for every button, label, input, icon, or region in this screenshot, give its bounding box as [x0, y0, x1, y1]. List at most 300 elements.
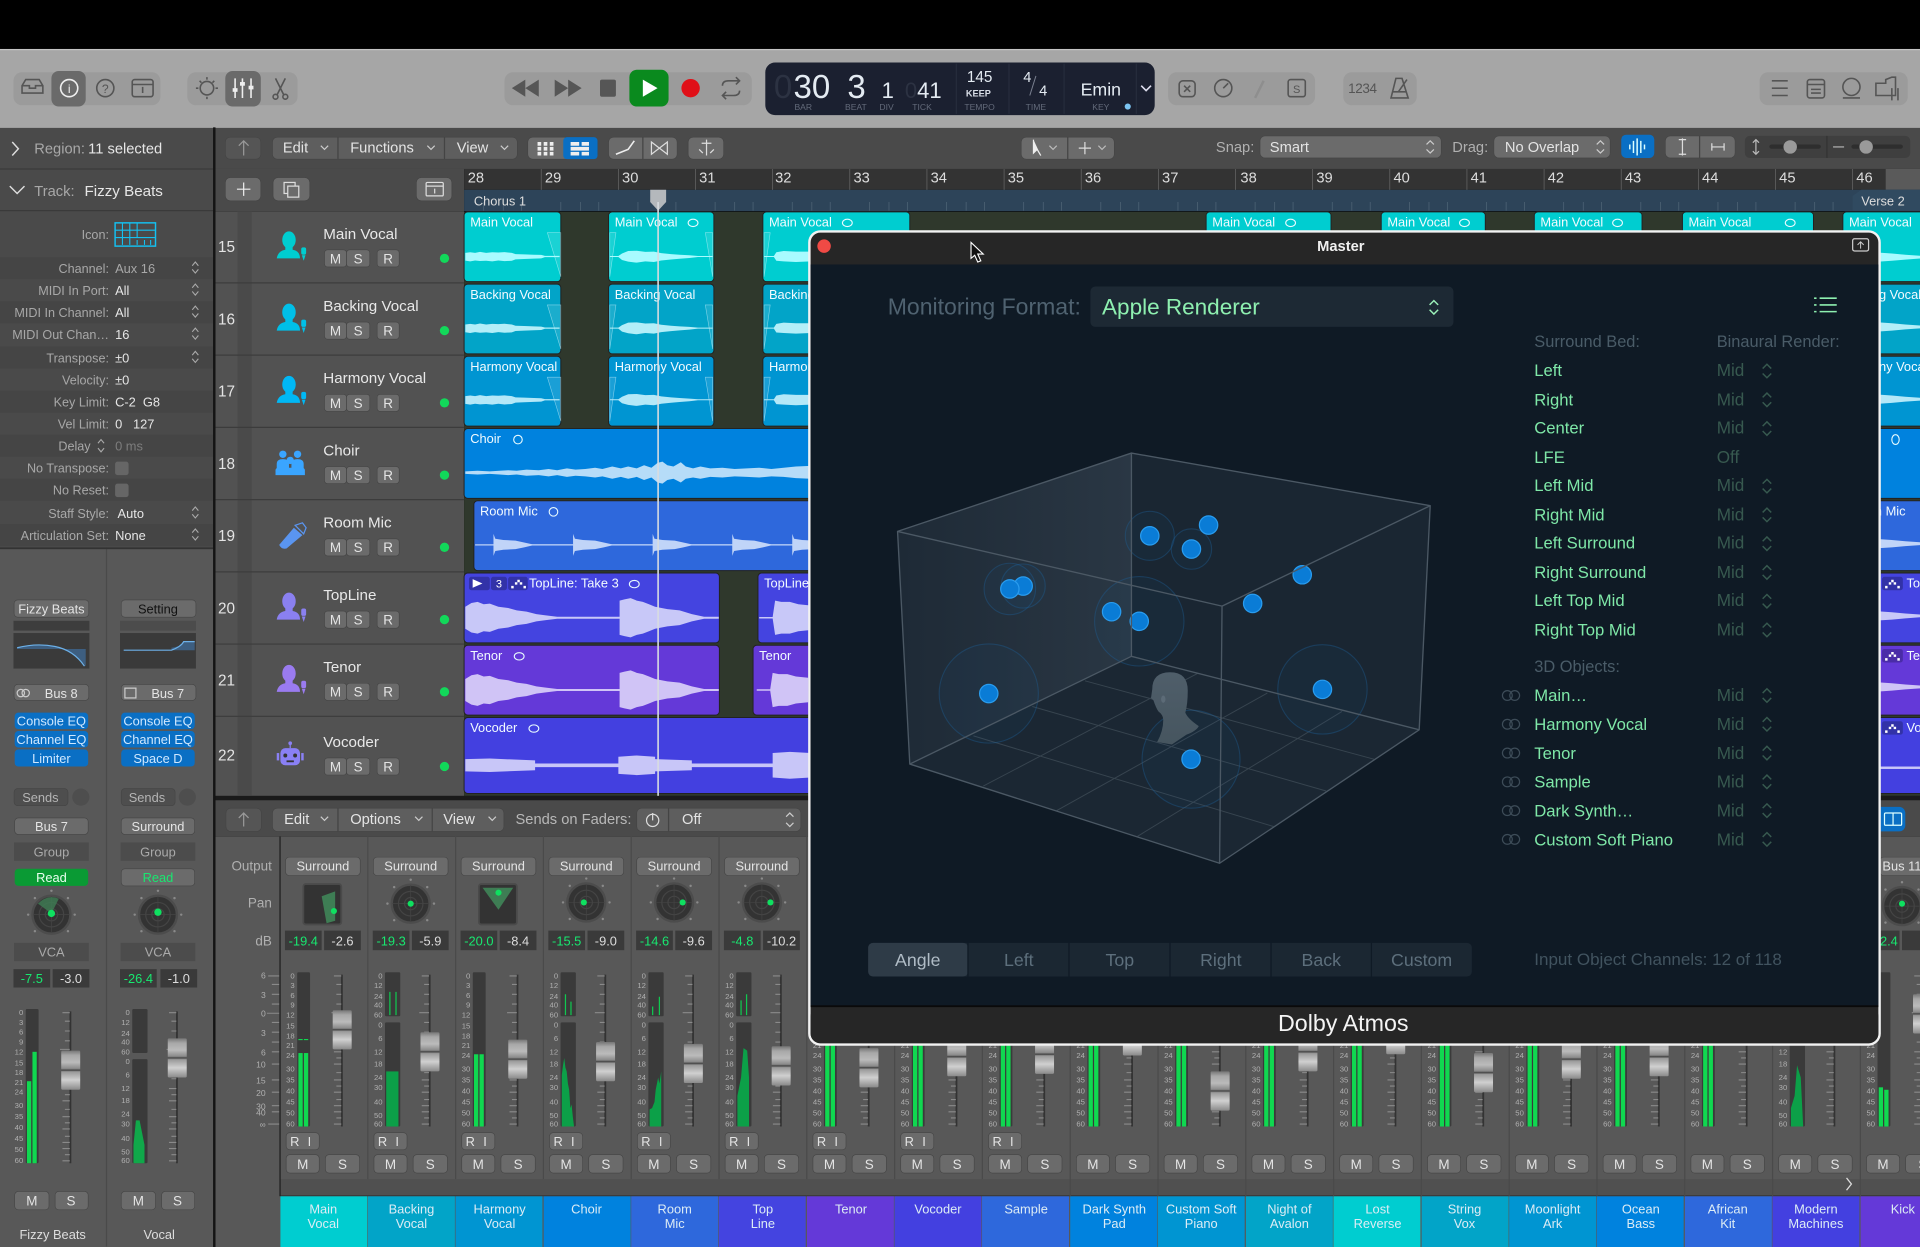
3D room visualisation: [898, 453, 1430, 863]
mixer channel names: Top: [752, 1201, 773, 1216]
LCD display: 4: [1039, 84, 1047, 100]
channel strip: Vocal: Sends: [129, 790, 165, 805]
track 17: Harmony Vocal: 17: [218, 384, 235, 401]
mixer channel names: Vocal: [484, 1216, 515, 1231]
playhead: [650, 190, 666, 796]
take folder controls: 3: [496, 579, 502, 591]
surround bed list: Right: [1534, 390, 1574, 409]
room wireframe: [898, 453, 1430, 863]
strip: Dark Synth Pad: [1076, 955, 1150, 1173]
surround bed list: Mid: [1717, 360, 1744, 380]
track headers: [216, 212, 464, 796]
strip: Harmony Vocal: -8.4: [507, 933, 529, 948]
strip: African Kit: [1691, 955, 1764, 1173]
meter and fader: [15, 1008, 80, 1165]
strip: Top Line: -10.2: [767, 933, 796, 948]
3D objects list: 3D Objects:: [1534, 658, 1620, 676]
timeline ruler: 28: [468, 170, 484, 186]
LCD display: TICK: [912, 102, 932, 112]
region labels: Tenor: [759, 648, 792, 663]
footer: Dolby Atmos: Dolby Atmos: [1278, 1010, 1409, 1036]
mixer channel names: Pad: [1103, 1216, 1126, 1231]
LCD display: 0: [905, 78, 917, 103]
track inspector parameters: No Reset:: [53, 484, 109, 498]
mixer toolbar: Off: [682, 812, 702, 828]
view angle tabs: Right: [1200, 950, 1242, 970]
strip: Custom Soft Piano: [1164, 955, 1238, 1173]
track 21: Tenor: [218, 659, 449, 700]
timeline ruler: 33: [853, 170, 870, 186]
take folder controls: [469, 577, 1903, 735]
master fader scale: 0: [261, 1008, 266, 1018]
master fader scale: 3: [261, 990, 266, 1000]
arrange toolbar: [216, 128, 1920, 169]
top black bar: [0, 0, 1920, 49]
channel strip: Vocal: Setting: [138, 601, 178, 616]
track inspector parameters: C-2 G8: [115, 395, 160, 410]
toolbar group: lists, notes, loops, media: [1760, 72, 1908, 105]
strip: Room Mic: -14.6: [640, 933, 669, 948]
track 16: Backing Vocal: 16: [218, 311, 235, 328]
footer: Dolby Atmos: [811, 1005, 1878, 1043]
mixer channel names: Tenor: [835, 1201, 868, 1216]
track inspector parameters: Channel:: [58, 262, 109, 276]
timeline ruler: 42: [1548, 170, 1564, 186]
track inspector parameters: 0 ms: [115, 439, 143, 454]
LCD display: 30: [793, 69, 830, 106]
surround bed list: Mid: [1717, 504, 1744, 524]
menu: edit, functions, view: Edit: [283, 140, 308, 156]
track inspector parameters: ±0: [115, 372, 129, 387]
track inspector parameters: Transpose:: [46, 351, 109, 365]
strip: Backing Vocal: Surround: [384, 859, 437, 874]
channel strip: Fizzy Beats: Read: [36, 870, 67, 885]
channel strip: Vocal: Read: [143, 870, 173, 885]
strip: Harmony Vocal: [461, 857, 536, 1173]
track inspector parameters: Delay: [58, 440, 91, 454]
channel strip: Fizzy Beats: -3.0: [60, 971, 82, 986]
surround bed list: Mid: [1717, 619, 1744, 639]
mixer channel names: [280, 1196, 1920, 1247]
master fader scale: 20: [256, 1088, 266, 1098]
track 18: Choir: Choir: [323, 443, 360, 460]
strip: Main Vocal: Surround: [296, 859, 349, 874]
channel strip: Fizzy Beats: Limiter: [32, 751, 71, 766]
toolbar group: brightness, mixer, scissors: [187, 71, 298, 107]
mixer channel names: Machines: [1788, 1216, 1843, 1231]
snap and drag settings: Drag:: [1452, 140, 1488, 156]
strip: Ocean Bass: [1603, 955, 1677, 1173]
region labels: Backing Vocal: [769, 287, 850, 302]
track inspector parameters: All: [115, 283, 129, 298]
timeline ruler: 34: [931, 170, 947, 186]
mixer channel names: Kit: [1720, 1216, 1736, 1231]
region labels: Main Vocal: [1849, 215, 1912, 230]
view angle tabs: Back: [1301, 950, 1341, 970]
mixer channel names: Vocoder: [914, 1201, 962, 1216]
strip: Modern Machines: [1779, 971, 1852, 1173]
surround bed list: Mid: [1717, 590, 1744, 610]
channel strip: Fizzy Beats: Bus 7: [35, 819, 68, 834]
menu: edit, functions, view: View: [457, 140, 489, 156]
track 15: Main Vocal: 15: [218, 239, 235, 256]
strip: Backing Vocal: -5.9: [419, 933, 441, 948]
channel strip: Fizzy Beats: Channel EQ: [16, 732, 86, 747]
mixer channel names: Custom Soft: [1166, 1201, 1237, 1216]
surround bed list: Right Mid: [1534, 505, 1605, 524]
surround bed list: Mid: [1717, 562, 1744, 582]
surround bed list: Left: [1534, 361, 1562, 380]
surround bed list: Right Top Mid: [1534, 620, 1636, 639]
region labels: Main Vocal: [470, 215, 533, 230]
region labels: Tenor: [470, 648, 503, 663]
timeline ruler: 29: [545, 170, 561, 186]
track inspector parameters: [0, 223, 213, 546]
toolbar group: library, info, help, download: [13, 71, 160, 107]
track inspector parameters: Key Limit:: [54, 396, 109, 410]
toolbar group: library, info, help, download: ?: [102, 82, 109, 96]
track inspector parameters: Auto: [118, 506, 144, 521]
floor grid: [973, 673, 1374, 836]
track inspector parameters: 16: [115, 327, 129, 342]
channel strip: Vocal: Space D: [133, 751, 183, 766]
panel divider: [213, 127, 216, 1247]
channel strip: Vocal: Console EQ: [123, 713, 193, 728]
channel strip: Fizzy Beats: -7.5: [21, 971, 43, 986]
3D objects list: [1502, 658, 1771, 849]
track inspector parameters: Aux 16: [115, 261, 155, 276]
marker track: Chorus 1, Verse 2: Chorus 1: [474, 194, 526, 209]
arrange regions: [464, 212, 1920, 796]
inspector header: Fizzy Beats: [84, 183, 163, 200]
3D objects list: Sample: [1534, 772, 1591, 791]
channel strip: Vocal: Surround: [132, 819, 184, 834]
region labels: Harmony Vocal: [470, 359, 557, 374]
channel strip: Vocal: -1.0: [168, 971, 190, 986]
timeline ruler: 43: [1625, 170, 1641, 186]
window title bar: [817, 239, 1869, 255]
strip: Top Line: [724, 857, 800, 1173]
3D objects list: Mid: [1717, 714, 1744, 734]
channel strip: Vocal: Channel EQ: [123, 732, 193, 747]
surround bed list: Surround Bed:: [1534, 333, 1640, 351]
inspector header: Region:: [34, 142, 85, 158]
strip: Choir: -9.0: [595, 933, 617, 948]
master fader scale: 40: [256, 1107, 266, 1117]
region labels: Main Vocal: [1689, 215, 1751, 230]
strip: Top Line: Surround: [735, 859, 788, 874]
track 18: Choir: [218, 443, 449, 484]
mixer channel names: Moonlight: [1525, 1201, 1581, 1216]
mixer toolbar: View: [443, 812, 475, 828]
monitoring format selector: [888, 287, 1453, 327]
mixer channel names: Kick: [1891, 1201, 1916, 1216]
track inspector parameters: No Transpose:: [27, 462, 109, 476]
surround bed list: Mid: [1717, 475, 1744, 495]
strip: Room Mic: Surround: [648, 859, 701, 874]
strip: Main Vocal: -2.6: [331, 933, 354, 948]
view mode buttons: [528, 137, 598, 159]
3D objects list: Mid: [1717, 771, 1744, 791]
pan knob: [27, 890, 76, 934]
strip: Kick / Bus 11: [1866, 857, 1920, 1173]
3D objects list: Main…: [1534, 686, 1587, 705]
mixer channel names: Harmony: [474, 1201, 526, 1216]
surround bed list: Mid: [1717, 417, 1744, 437]
LCD display: 1: [882, 78, 894, 103]
timeline ruler: 45: [1779, 170, 1796, 186]
strip: Harmony Vocal: -20.0: [464, 933, 494, 948]
master fader scale: 3: [261, 1028, 266, 1038]
3D objects list: Tenor: [1534, 744, 1576, 763]
region labels: [470, 215, 1920, 735]
mixer channel names: Lost: [1365, 1201, 1390, 1216]
track inspector parameters: Articulation Set:: [21, 529, 109, 543]
channel strip: Vocal: M: [133, 1193, 144, 1208]
track 17: Harmony Vocal: [218, 370, 449, 411]
surround bed list: Right Surround: [1534, 563, 1646, 582]
pan knob: [133, 890, 182, 934]
3D objects list: Mid: [1717, 743, 1744, 763]
track 17: Harmony Vocal: Harmony Vocal: [323, 370, 426, 387]
LCD display: 0: [774, 69, 792, 106]
channel strip: Fizzy Beats: Group: [34, 845, 69, 860]
mixer channel names: Vocal: [396, 1216, 427, 1231]
mixer channel names: Sample: [1004, 1201, 1048, 1216]
loop icons: [514, 219, 1899, 732]
mouse cursor: [971, 242, 983, 262]
track inspector parameters: None: [115, 528, 146, 543]
track inspector parameters: 0 127: [115, 417, 154, 432]
mixer channel names: Main: [309, 1201, 337, 1216]
inspector header: [0, 128, 214, 797]
main toolbar: [0, 49, 1920, 128]
channel strip: Vocal: Group: [140, 845, 176, 860]
track 15: Main Vocal: Main Vocal: [323, 226, 397, 243]
region labels: Main Vocal: [615, 215, 678, 230]
channel strip: Fizzy Beats: Fizzy Beats: [18, 601, 85, 616]
region labels: Choir: [470, 431, 502, 446]
strip: Lost Reverse: [1340, 955, 1413, 1173]
strip: Moonlight Ark: [1515, 955, 1589, 1173]
mixer channel names: Choir: [571, 1201, 603, 1216]
object channel count: Input Object Channels: 12 of 118: [1534, 950, 1782, 969]
mixer channel names: Ark: [1543, 1216, 1563, 1231]
channel strip: Fizzy Beats: Sends: [22, 790, 59, 805]
scroll chevron: [1847, 1178, 1851, 1190]
track inspector parameters: MIDI In Channel:: [14, 306, 109, 320]
region labels: Main Vocal: [769, 215, 832, 230]
view angle tabs: Custom: [1391, 950, 1452, 970]
sound object halos: [939, 511, 1367, 808]
strip: Main Vocal: [285, 857, 361, 1173]
channel strip: Vocal: -26.4: [124, 971, 153, 986]
monitoring format selector: Apple Renderer: [1102, 295, 1260, 320]
track inspector parameters: Staff Style:: [48, 507, 109, 521]
split view button: [1873, 807, 1905, 831]
track 20: TopLine: TopLine: [323, 587, 376, 604]
region labels: Main Vocal: [1540, 215, 1603, 230]
strip: String Vox: [1428, 955, 1501, 1173]
master fader scale: 6: [261, 1047, 266, 1057]
surround bed list: Left Mid: [1534, 476, 1593, 495]
strip: Top Line: -4.8: [731, 933, 753, 948]
region labels: Room Mic: [1848, 504, 1906, 519]
strip: Kick / Bus 11: 2.4: [1880, 933, 1898, 948]
track 15: Main Vocal: [218, 226, 449, 267]
LCD display: KEEP: [966, 89, 991, 99]
3D objects list: Dark Synth…: [1534, 802, 1633, 821]
timeline ruler: 38: [1240, 170, 1257, 186]
mixer channel names: Modern: [1794, 1201, 1838, 1216]
strip: Main Vocal: -19.4: [289, 933, 318, 948]
mixer channel names: African: [1708, 1201, 1748, 1216]
master fader scale: 15: [256, 1076, 266, 1086]
mixer channel names: Mic: [665, 1216, 685, 1231]
track 16: Backing Vocal: Backing Vocal: [323, 298, 419, 315]
inspector header: Track:: [34, 184, 75, 200]
region labels: Harmony Vocal: [769, 359, 856, 374]
region labels: Main Vocal: [1212, 215, 1275, 230]
surround bed list: LFE: [1534, 448, 1565, 467]
track 21: Tenor: Tenor: [323, 659, 361, 676]
track 22: Vocoder: Vocoder: [323, 734, 379, 751]
automation buttons: [609, 137, 724, 159]
region labels: Harmony Vocal: [615, 359, 702, 374]
region labels: Backing Vocal: [615, 287, 695, 302]
master fader scale: 10: [256, 1060, 266, 1070]
timeline ruler: 30: [622, 170, 638, 186]
region labels: Backing Vocal: [470, 287, 551, 302]
icon: drum machine: [115, 223, 156, 246]
strip: Vocoder: [901, 955, 974, 1173]
menu: edit, functions, view: [272, 137, 517, 159]
strip: Choir: Surround: [560, 859, 613, 874]
strip: Room Mic: [636, 857, 712, 1173]
3D objects list: Custom Soft Piano: [1534, 830, 1673, 849]
marker track: Chorus 1, Verse 2: Verse 2: [1861, 194, 1905, 209]
track 19: Room Mic: [218, 515, 449, 556]
strip: Choir: -15.5: [552, 933, 581, 948]
region labels: Main Vocal: [1387, 215, 1450, 230]
window body: [811, 264, 1878, 1007]
strip: Harmony Vocal: Surround: [472, 859, 525, 874]
marker track: Chorus 1, Verse 2: [464, 190, 1920, 211]
view angle tabs: Top: [1105, 950, 1134, 970]
track inspector parameters: ±0: [115, 350, 129, 365]
LCD display: DIV: [879, 102, 894, 112]
mixer row labels: Pan: [248, 895, 272, 910]
toolbar group: smart controls: S: [1293, 84, 1300, 96]
timeline ruler: 44: [1702, 170, 1718, 186]
strip: Choir: [548, 857, 624, 1173]
track 20: TopLine: [218, 587, 449, 628]
mixer channel names: Backing: [389, 1201, 434, 1216]
mixer channel strips: [216, 836, 1920, 1247]
surround bed list: Center: [1534, 418, 1585, 437]
count-in and metronome: [1343, 72, 1417, 105]
LCD display: Emin: [1081, 80, 1121, 100]
snap and drag settings: Snap:: [1216, 140, 1254, 156]
LCD display: BAR: [794, 102, 812, 112]
mixer channel names: Avalon: [1270, 1216, 1309, 1231]
view angle tabs: [868, 943, 1472, 977]
strip: Sample: [989, 955, 1062, 1173]
track 19: Room Mic: 19: [218, 528, 235, 545]
timeline ruler: 36: [1085, 170, 1101, 186]
region labels: TopLine: Take 3: [529, 576, 619, 591]
timeline ruler: 37: [1162, 170, 1178, 186]
transport controls: [504, 70, 752, 107]
toolbar group: library, info, help, download: i: [68, 82, 71, 96]
strip: Room Mic: -9.6: [683, 933, 705, 948]
waveforms: [465, 251, 1920, 779]
timeline ruler: 41: [1471, 170, 1487, 186]
3D objects list: Mid: [1717, 685, 1744, 705]
meter and fader: [121, 1008, 187, 1165]
snap and drag settings: No Overlap: [1505, 140, 1579, 156]
master fader scale: [256, 970, 279, 1130]
mixer toolbar: [216, 800, 1920, 837]
mixer channel names: Vox: [1454, 1216, 1476, 1231]
mixer channel names: Line: [751, 1216, 775, 1231]
track 19: Room Mic: Room Mic: [323, 515, 392, 532]
view angle tabs: Left: [1004, 950, 1034, 970]
timeline ruler: 46: [1856, 170, 1873, 186]
mixer toolbar: Edit: [284, 812, 309, 828]
channel strip: Vocal: Bus 7: [151, 686, 184, 701]
track 21: Tenor: 21: [218, 673, 235, 690]
sound objects: [980, 516, 1332, 768]
mixer toolbar: Sends on Faders:: [516, 812, 631, 828]
tool pickers: [1021, 137, 1114, 159]
channel strip: Fizzy Beats: Fizzy Beats: [19, 1227, 86, 1242]
surround bed list: Mid: [1717, 389, 1744, 409]
region fades: [547, 233, 770, 421]
monitoring format selector: Monitoring Format:: [888, 294, 1081, 320]
region labels: TopLine: [764, 576, 809, 591]
mixer row labels: [231, 859, 272, 948]
LCD display: [765, 62, 1155, 115]
region labels: Backing Vocal: [1840, 287, 1920, 302]
LCD display: TEMPO: [964, 102, 995, 112]
track 22: Vocoder: [218, 734, 449, 775]
mixer channel names: String: [1448, 1201, 1481, 1216]
channel strip: Fizzy Beats: S: [67, 1193, 76, 1208]
surround bed list: Off: [1717, 447, 1740, 467]
track inspector parameters: Icon:: [82, 228, 109, 242]
master fader scale: ∞: [260, 1120, 266, 1130]
region labels: Vocoder: [470, 720, 518, 735]
channel strip: Fizzy Beats: Bus 8: [45, 686, 78, 701]
mixer separator: [216, 796, 1920, 800]
LCD display: KEY: [1092, 102, 1110, 112]
snap and drag settings: [1216, 136, 1610, 158]
mixer channel names: Room: [658, 1201, 692, 1216]
window: Dolby Atmos Master panel: [809, 231, 1880, 1044]
track inspector parameters: Vel Limit:: [58, 418, 109, 432]
LCD display: 41: [917, 78, 942, 103]
LCD display: TIME: [1026, 102, 1046, 112]
surround bed list: Mid: [1717, 533, 1744, 553]
listener head: [1151, 672, 1199, 744]
mixer channel names: Night of: [1267, 1201, 1312, 1216]
timeline ruler: 39: [1316, 170, 1333, 186]
toolbar group: smart controls: [1168, 72, 1315, 105]
track 22: Vocoder: 22: [218, 747, 235, 764]
LCD display: BEAT: [845, 102, 868, 112]
LCD display: 3: [847, 69, 866, 106]
